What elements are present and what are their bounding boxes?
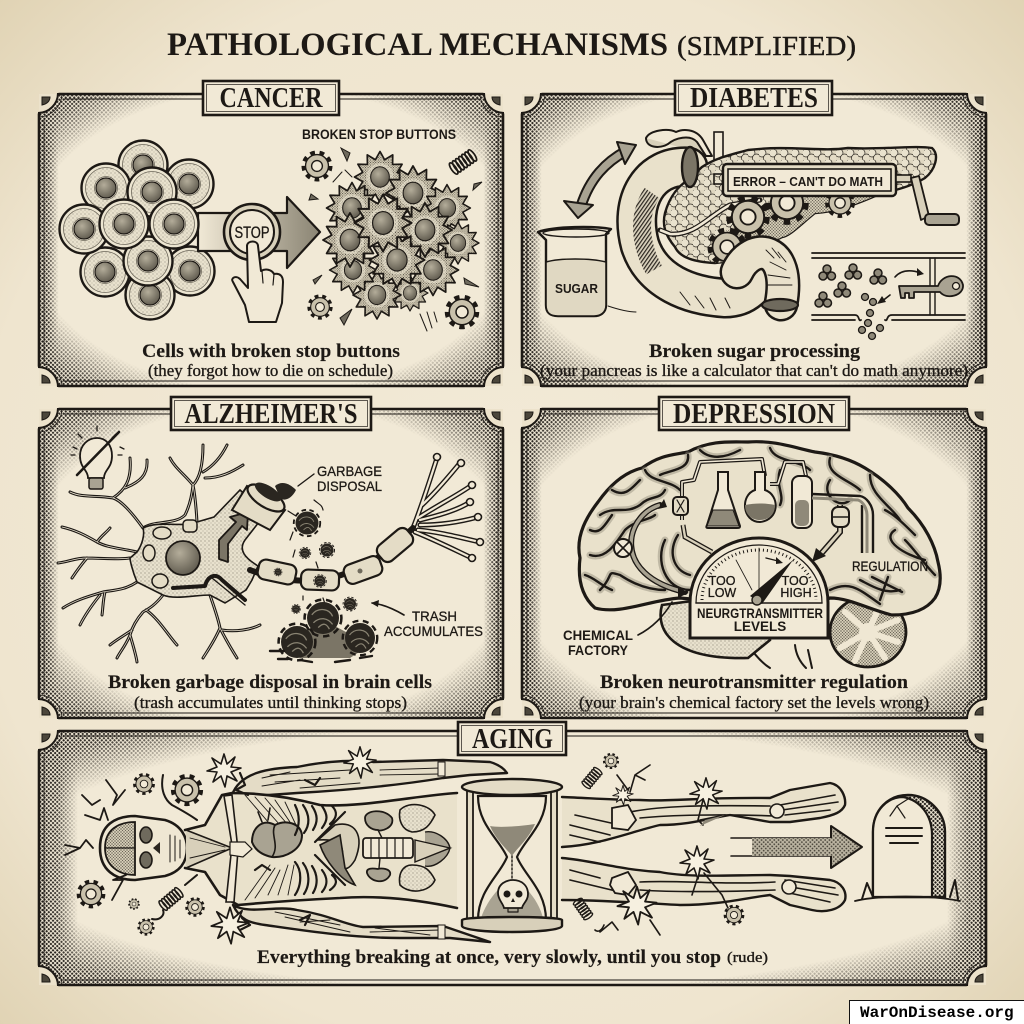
caption: alzheimer's: (trash accumulates until thinking stops) — [134, 693, 407, 712]
panel: alzheimer's — [38, 397, 504, 719]
caption: aging: (rude) — [727, 950, 768, 966]
fractures and debris — [690, 778, 722, 809]
skull with exposed brain — [100, 816, 187, 880]
label: broken stop buttons: BROKEN STOP BUTTONS — [302, 127, 456, 142]
top leg — [562, 783, 845, 847]
panel: diabetes — [521, 81, 987, 387]
caption: alzheimer's: Broken garbage disposal in brain cells — [108, 672, 432, 693]
pancreas body — [660, 147, 936, 263]
insulin key diagram — [812, 253, 965, 340]
icon: sugar beaker — [538, 227, 636, 316]
icon: heart — [252, 808, 302, 857]
icon: crossed-out light bulb — [71, 426, 124, 489]
watermark: WarOnDisease.org — [860, 1004, 1014, 1022]
caption: cancer — [142, 341, 400, 380]
label: trash accumulates — [371, 600, 483, 639]
caption: diabetes: Broken sugar processing — [649, 341, 861, 362]
left-side debris: gears, springs and cracks — [65, 747, 376, 944]
heading: alzheimer's: ALZHEIMER'S — [184, 399, 358, 430]
label: regulation: REGULATION — [852, 559, 928, 574]
icon: double-headed arrow — [564, 142, 636, 218]
caption: depression: (your brain's chemical factory set the levels wrong) — [579, 693, 929, 712]
debris: gears, spring and shards — [304, 148, 482, 331]
cell body and tube to disposal — [130, 490, 266, 605]
pancreas and duodenum machine — [637, 130, 959, 311]
brain fold shading — [585, 448, 935, 604]
terminal buttons — [434, 454, 484, 562]
bones and hatching — [570, 795, 838, 902]
label: trash accumulates: ACCUMULATES — [384, 623, 483, 639]
error sign: ERROR – CAN'T DO MATH — [733, 174, 883, 189]
label: chemical factory — [563, 602, 672, 658]
icon: stop button with hand — [224, 204, 283, 322]
label: garbage disposal: GARBAGE — [317, 463, 382, 479]
gauge: neurotransmitter levels: LEVELS — [734, 619, 786, 634]
torso — [185, 793, 457, 908]
chemistry apparatus — [673, 459, 873, 562]
panel: cancer — [38, 81, 504, 387]
curved arrow with valve — [614, 499, 688, 598]
watermark — [850, 1000, 1024, 1024]
human body with organs — [100, 760, 507, 942]
caption: cancer: Cells with broken stop buttons — [142, 341, 400, 362]
arrow through stop button — [150, 197, 320, 268]
garbage can disposal — [232, 479, 296, 530]
arrow to tombstone — [731, 826, 862, 868]
icon: skull in hourglass — [498, 880, 528, 912]
label: chemical factory: FACTORY — [568, 642, 629, 658]
title: (SIMPLIFIED) — [677, 31, 856, 61]
heading: depression: DEPRESSION — [673, 399, 835, 430]
error sign — [714, 164, 911, 196]
icon: stop button with hand: STOP — [234, 224, 270, 242]
label: garbage disposal: DISPOSAL — [317, 478, 382, 494]
test tube — [792, 476, 812, 528]
panel: aging — [38, 722, 987, 986]
torso outline — [185, 793, 457, 908]
broken cell cluster — [323, 152, 479, 319]
flask: round — [745, 472, 776, 522]
broken legs — [562, 754, 845, 935]
ribs — [295, 805, 345, 895]
brain folds — [585, 448, 935, 604]
cerebrum — [579, 442, 940, 615]
top leg outline — [562, 783, 845, 847]
gauge: neurotransmitter levels: NEURGTRANSMITTER — [697, 606, 823, 621]
label: chemical factory: CHEMICAL — [563, 627, 633, 643]
gauge: neurotransmitter levels — [690, 538, 828, 638]
heading: diabetes: DIABETES — [690, 83, 818, 114]
axon terminals — [413, 458, 480, 558]
dendrites — [58, 445, 260, 662]
label: trash accumulates: TRASH — [412, 608, 457, 624]
axon chain — [250, 525, 416, 591]
outlet tube — [737, 248, 798, 311]
gears in pancreas — [710, 184, 853, 264]
caption: alzheimer's — [108, 672, 432, 712]
brain — [579, 442, 940, 668]
heading: cancer: CANCER — [220, 83, 323, 114]
neuron — [58, 445, 484, 662]
crank handle — [911, 176, 959, 225]
duodenum mouth — [682, 147, 698, 187]
caption: depression — [579, 672, 929, 712]
trash pile — [270, 600, 377, 662]
temporal lobe — [661, 600, 770, 658]
icon: sugar beaker: SUGAR — [555, 281, 599, 296]
icon: tombstone — [855, 795, 960, 901]
gauge: neurotransmitter levels: LOW — [708, 586, 736, 600]
title: PATHOLOGICAL MECHANISMS — [167, 27, 668, 63]
caption: depression: Broken neurotransmitter regulation — [600, 672, 908, 693]
normal cell cluster — [60, 140, 214, 320]
gallbladder and ducts — [646, 130, 723, 160]
label: garbage disposal — [298, 463, 382, 494]
caption: cancer: (they forgot how to die on schedule) — [148, 361, 393, 380]
duodenum tube — [637, 167, 760, 310]
neck and chest — [186, 795, 296, 902]
gauge: neurotransmitter levels: HIGH — [780, 586, 812, 600]
caption: aging: Everything breaking at once, very slowly, until you stop — [257, 947, 721, 968]
outflow pipe — [812, 494, 873, 553]
organs — [318, 805, 450, 891]
flask: erlenmeyer — [706, 472, 740, 528]
gauge: neurotransmitter levels: TOO — [782, 574, 809, 588]
hourglass with skull — [462, 779, 562, 932]
caption: diabetes — [540, 341, 968, 380]
icon: up arrow in tube — [219, 512, 248, 562]
caption: diabetes: (your pancreas is like a calculator that can't do math anymore) — [540, 361, 968, 380]
cerebellum and stem — [748, 597, 906, 668]
gauge: neurotransmitter levels: TOO — [709, 574, 736, 588]
heading: aging: AGING — [472, 724, 553, 755]
bottom leg outline — [562, 858, 845, 911]
falling trash — [288, 500, 357, 614]
arms — [232, 760, 507, 942]
bottom leg — [562, 858, 845, 911]
panel: depression — [521, 397, 987, 719]
